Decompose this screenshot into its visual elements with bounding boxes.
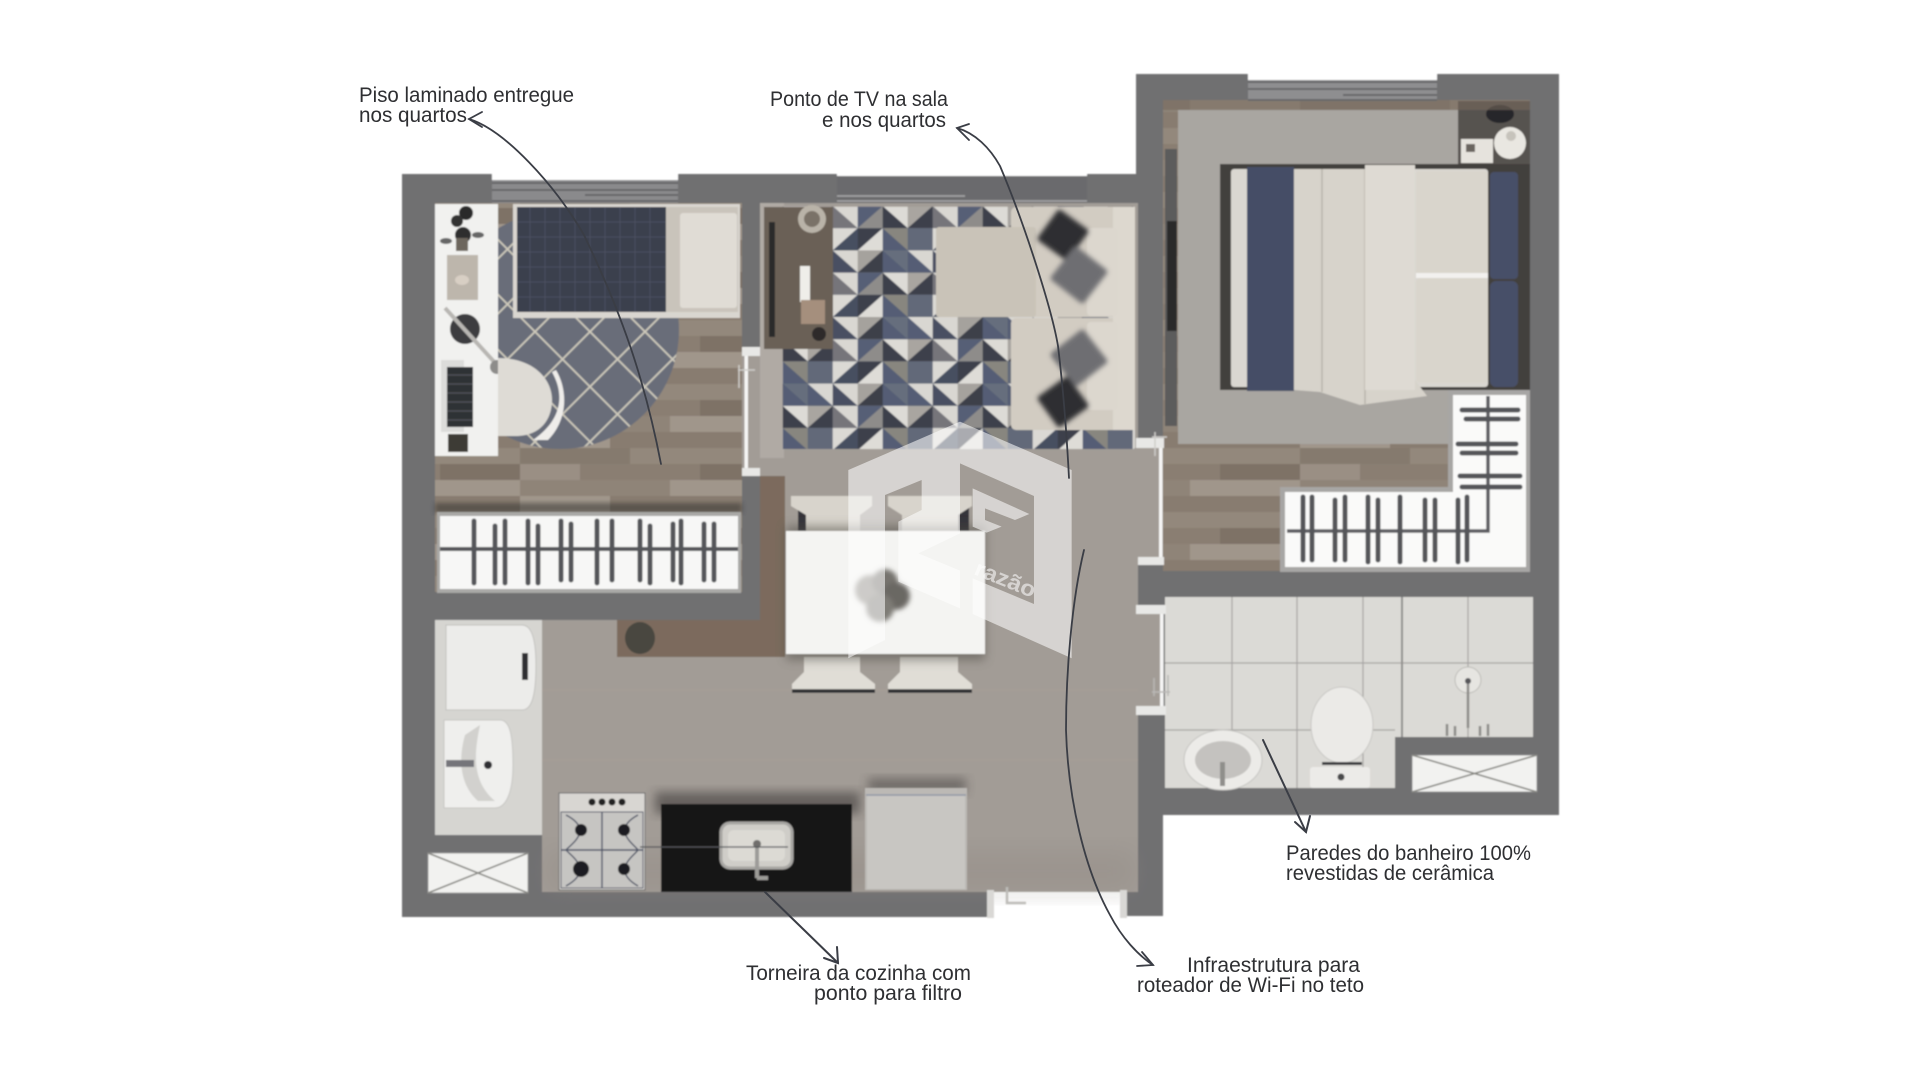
flower <box>855 569 910 622</box>
windows <box>492 74 1437 203</box>
arrow: piso laminado <box>469 112 661 464</box>
nightstand <box>1458 101 1530 164</box>
washing machine <box>446 625 536 710</box>
black counter <box>661 804 852 892</box>
callout: piso laminado: Piso laminado entregue <box>359 84 574 107</box>
wood counter <box>617 476 785 657</box>
shadows <box>655 792 860 814</box>
single bed <box>513 204 740 318</box>
callout: banheiro: Paredes do banheiro 100% <box>1286 842 1531 865</box>
floor plan <box>402 74 1559 918</box>
sofa <box>936 207 1135 430</box>
bedroom door <box>738 347 760 476</box>
blanket <box>1294 169 1427 405</box>
arrow: Wi-Fi <box>1066 550 1153 966</box>
stove <box>559 793 645 890</box>
panel: bathroom <box>1165 597 1533 790</box>
panel: living and kitchen floor <box>542 203 1163 892</box>
tv unit <box>764 205 833 349</box>
callout: torneira <box>746 962 971 1005</box>
bathroom door <box>1136 605 1170 715</box>
callout: ponto de TV <box>770 88 948 132</box>
wardrobe <box>435 503 742 593</box>
arrow: torneira <box>765 892 838 963</box>
panel: bedroom 1 <box>435 203 742 593</box>
sink and faucet <box>721 823 792 878</box>
laundry <box>435 620 542 835</box>
window: bedroom 1 <box>492 174 678 203</box>
callout: banheiro <box>1286 842 1531 885</box>
shower <box>1447 667 1488 736</box>
laundry shaft <box>428 853 528 893</box>
panel: bedroom 2 <box>1163 100 1530 572</box>
wood floor <box>1163 100 1530 571</box>
tank <box>444 720 513 808</box>
L-shaped wardrobe <box>1280 390 1530 572</box>
dining table and chairs <box>617 476 985 691</box>
callout: piso laminado <box>359 84 574 127</box>
chairs <box>791 496 972 691</box>
cushions <box>1036 208 1108 429</box>
tv panel <box>1165 149 1177 426</box>
callout: banheiro: revestidas de cerâmica <box>1286 862 1494 885</box>
callout: infraestrutura <box>1137 954 1364 997</box>
callout: torneira: Torneira da cozinha com <box>746 962 971 985</box>
window: living room <box>837 174 1087 203</box>
watermark logo <box>848 422 1072 658</box>
arrow: banheiro <box>1263 740 1310 832</box>
entry door <box>987 887 1127 918</box>
callout: piso laminado: nos quartos <box>359 104 467 127</box>
arrow: ponto de TV <box>957 124 1069 478</box>
callout: ponto de TV: Ponto de TV na sala <box>770 88 948 111</box>
washbasin <box>1184 730 1262 790</box>
callout: infraestrutura: Infraestrutura para <box>1187 954 1360 977</box>
toilet <box>1310 687 1373 788</box>
pillows <box>1416 171 1518 387</box>
bedroom 2 door <box>1136 432 1167 565</box>
kitchen appliances <box>559 778 967 892</box>
callout: ponto de TV: e nos quartos <box>822 109 946 132</box>
round rug <box>441 211 679 449</box>
walls <box>402 74 1559 917</box>
desk <box>435 204 504 456</box>
double bed <box>1220 164 1530 405</box>
fridge <box>865 788 967 890</box>
window: bedroom 2 <box>1248 74 1437 101</box>
watermark logo: razão <box>971 555 1040 603</box>
geometric rug <box>783 207 1135 449</box>
carpet <box>1178 110 1528 444</box>
blue runner <box>1247 167 1294 391</box>
callout: infraestrutura: roteador de Wi-Fi no teto <box>1137 974 1364 997</box>
desk chair <box>498 358 552 436</box>
wood floor <box>435 203 742 592</box>
bathroom shaft <box>1412 755 1537 792</box>
callout: torneira: ponto para filtro <box>814 982 962 1005</box>
